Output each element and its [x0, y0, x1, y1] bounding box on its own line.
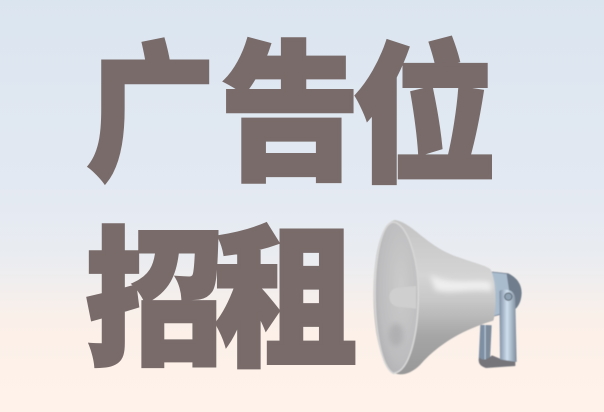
strap rivet — [505, 293, 512, 300]
title line one: 广告位: 位 — [353, 34, 496, 202]
title line two: 招租: 招 — [86, 218, 224, 384]
megaphone bell — [373, 220, 496, 374]
megaphone bell inner — [375, 222, 418, 373]
megaphone inner shadow — [389, 324, 403, 346]
megaphone handle loop — [479, 325, 515, 368]
megaphone inner post — [389, 286, 416, 309]
megaphone rear cap — [492, 272, 522, 317]
title line two: 招租 — [86, 217, 357, 386]
title line two: 招租: 租 — [215, 217, 357, 386]
icon: megaphone — [373, 220, 522, 374]
title line one: 广告位: 广 — [87, 34, 214, 198]
title line one: 广告位: 告 — [220, 32, 359, 200]
megaphone highlight — [430, 275, 492, 292]
title line one: 广告位 — [87, 32, 496, 202]
handle front strap — [499, 290, 517, 362]
